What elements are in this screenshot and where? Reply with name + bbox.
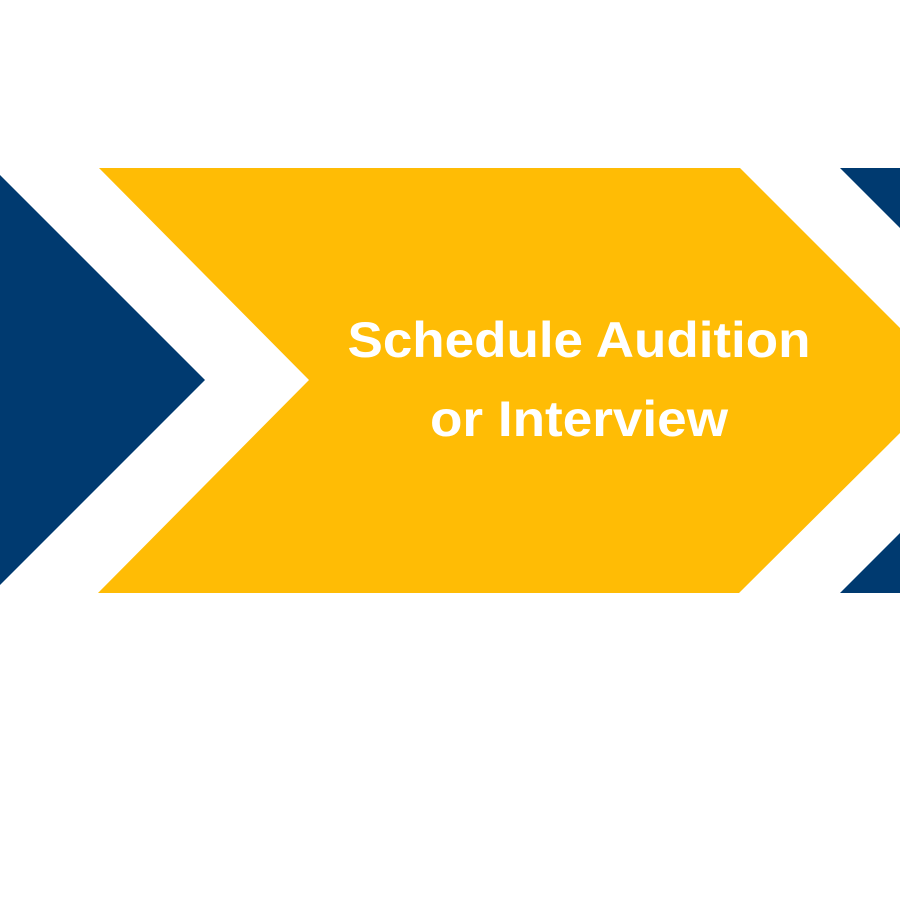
label: schedule audition or interview: or Interview [430, 391, 728, 447]
left navy chevron tip [0, 175, 205, 585]
right navy chevron bottom fragment [840, 533, 900, 593]
yellow chevron with label [98, 168, 900, 593]
right navy chevron top fragment [840, 168, 900, 228]
label: schedule audition or interview: Schedule Audition [348, 312, 810, 368]
